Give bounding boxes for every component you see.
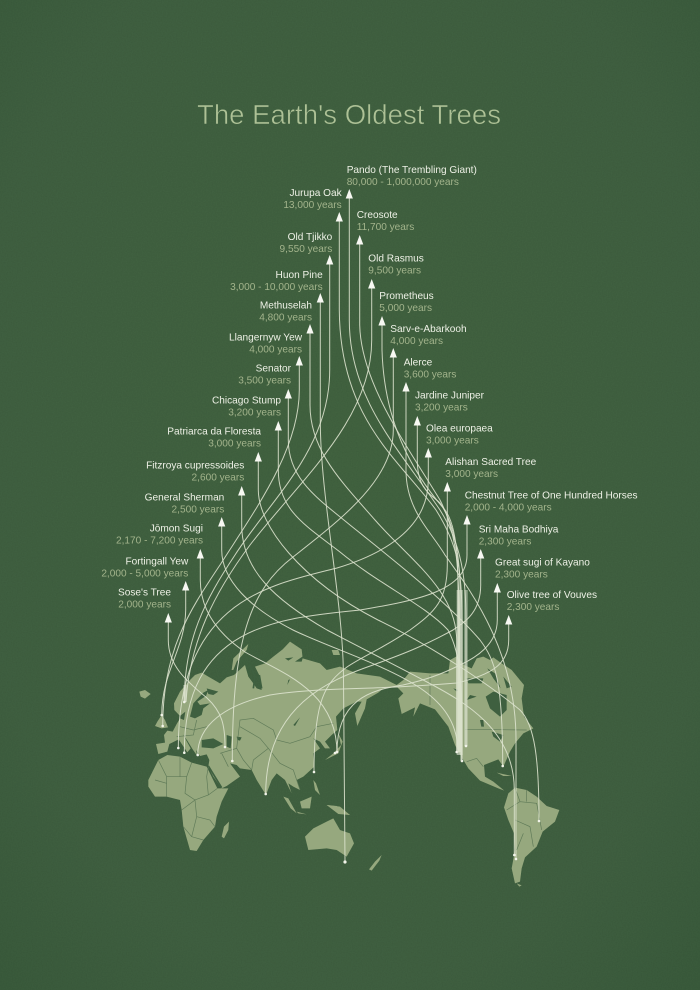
label: Olea europaea: Olea europaea	[426, 424, 493, 434]
map: islands and Australia	[139, 644, 354, 857]
arrow: Patriarca da Floresta	[255, 452, 540, 822]
map: inland seas and lakes	[190, 656, 512, 748]
arrow: Alerce	[402, 382, 517, 860]
arrow: Sarv-e-Abarkooh	[231, 348, 397, 762]
label: Fitzroya cupressoides: Fitzroya cupressoides	[146, 460, 244, 472]
map: landmasses, Old World coordinates	[139, 642, 533, 857]
label: Fitzroya cupressoides: 2,600 years	[192, 472, 244, 484]
label: Pando: Pando (The Trembling Giant)	[347, 165, 477, 176]
arrow: Jardine Juniper	[414, 416, 460, 752]
label: Chicago Stump: Chicago Stump	[212, 396, 281, 406]
arrow: Old Tjikko	[183, 255, 333, 703]
arrow: Olive tree of Vouves	[196, 615, 512, 756]
label: Chicago Stump: 3,200 years	[228, 408, 281, 418]
label: Alishan Sacred Tree: 3,000 years	[445, 469, 498, 480]
label: Huon Pine	[230, 270, 323, 293]
label: Prometheus: Prometheus	[379, 291, 434, 302]
label: Great sugi of Kayano: Great sugi of Kayano	[495, 558, 590, 568]
arrow: Huon Pine	[317, 293, 347, 864]
label: Sarv-e-Abarkooh: Sarv-e-Abarkooh	[390, 324, 467, 335]
label: Prometheus	[379, 291, 434, 314]
label: Chestnut Tree of One Hundred Horses	[465, 490, 638, 514]
arrow: Sose's Tree	[165, 613, 226, 748]
label: Huon Pine: Huon Pine	[276, 270, 323, 281]
label: Great sugi of Kayano	[495, 558, 590, 580]
label: Sri Maha Bodhiya	[479, 524, 559, 548]
label: Methuselah: 4,800 years	[259, 312, 312, 324]
label: Huon Pine: 3,000 - 10,000 years	[230, 282, 323, 293]
label: Patriarca da Floresta: Patriarca da Floresta	[167, 426, 261, 438]
label: Pando	[347, 165, 477, 188]
map: Africa	[148, 755, 228, 851]
label: Old Tjikko	[280, 232, 333, 255]
arrow: Jomon Sugi	[197, 549, 337, 754]
label: Olea europaea	[426, 424, 493, 446]
label: Llangernyw Yew: 4,000 years	[249, 344, 302, 356]
label: Chicago Stump	[212, 396, 281, 418]
label: Sarv-e-Abarkooh	[390, 324, 467, 347]
label: Fitzroya cupressoides	[146, 460, 244, 484]
label: Fortingall Yew	[101, 556, 189, 580]
label: Sose's Tree	[118, 588, 171, 610]
label: Old Rasmus: Old Rasmus	[368, 254, 424, 264]
label: Pando: 80,000 - 1,000,000 years	[347, 177, 459, 188]
label: Sose's Tree: Sose's Tree	[118, 588, 171, 598]
label: Methuselah	[259, 300, 312, 324]
arrow: Methuselah	[306, 324, 458, 753]
label: Olive tree of Vouves: Olive tree of Vouves	[507, 590, 597, 601]
label: Senator: Senator	[256, 364, 292, 374]
label: Olea europaea: 3,000 years	[426, 436, 479, 446]
label: Jardine Juniper: 3,200 years	[415, 402, 468, 414]
label: Old Tjikko: 9,550 years	[280, 244, 332, 255]
label: Senator: 3,500 years	[238, 376, 291, 386]
arrow: Chestnut Tree of One Hundred Horses	[183, 515, 471, 754]
label: Old Rasmus: 9,500 years	[368, 266, 421, 276]
label: Sri Maha Bodhiya: Sri Maha Bodhiya	[479, 524, 559, 536]
label: Jurupa Oak	[283, 188, 343, 211]
label: Creosote: 11,700 years	[357, 222, 414, 233]
label: Alerce: 3,600 years	[404, 370, 456, 380]
arrow: Llangernyw Yew	[161, 356, 303, 727]
label: General Sherman: 2,500 years	[172, 504, 224, 516]
label: Prometheus: 5,000 years	[379, 303, 432, 314]
label: General Sherman: General Sherman	[145, 492, 224, 504]
label: Jurupa Oak: Jurupa Oak	[290, 188, 343, 199]
label: Sose's Tree: 2,000 years	[118, 600, 171, 610]
label: Llangernyw Yew	[229, 332, 303, 356]
label: General Sherman	[145, 492, 224, 516]
map: country borders	[155, 675, 527, 840]
label: Jardine Juniper	[415, 390, 485, 414]
label: Sarv-e-Abarkooh: 4,000 years	[390, 336, 443, 347]
label: Jomon Sugi	[116, 524, 203, 546]
arrow: Fortingall Yew	[160, 581, 189, 716]
arrow: Pando	[346, 189, 467, 747]
label: Jomon Sugi: 2,170 - 7,200 years	[116, 536, 203, 546]
label: Senator	[238, 364, 292, 386]
map: Siberian inlets	[250, 665, 262, 688]
label: Old Tjikko: Old Tjikko	[288, 232, 333, 243]
bundle: overlapping California and Nevada lines	[184, 590, 468, 755]
arrow: Fitzroya cupressoides	[238, 486, 516, 856]
label: Alishan Sacred Tree	[445, 457, 537, 480]
label: Olive tree of Vouves: 2,300 years	[507, 602, 559, 613]
arrow: Sri Maha Bodhiya	[264, 549, 484, 795]
label: Great sugi of Kayano: 2,300 years	[495, 570, 548, 580]
map: South America and New Zealand	[327, 773, 559, 887]
label: Creosote	[357, 210, 414, 233]
arrow: Olea europaea	[177, 448, 432, 749]
label: Old Rasmus	[368, 254, 424, 276]
label: Alerce	[404, 358, 456, 380]
map: Eurasia joined to North America	[156, 642, 533, 795]
label: Jardine Juniper: Jardine Juniper	[415, 390, 485, 402]
world map	[139, 642, 559, 887]
arrow: Alishan Sacred Tree	[313, 482, 451, 773]
arrow: Old Rasmus	[186, 279, 375, 702]
title: The Earth's Oldest Trees	[197, 99, 501, 130]
arrow: Chicago Stump	[275, 421, 461, 761]
map: Red Sea	[208, 766, 222, 788]
label: Creosote: Creosote	[357, 210, 398, 221]
label: Sri Maha Bodhiya: 2,300 years	[479, 536, 531, 548]
arrow: Prometheus	[378, 316, 458, 752]
label: Patriarca da Floresta	[167, 426, 261, 450]
label: Llangernyw Yew: Llangernyw Yew	[229, 332, 303, 344]
label: Alerce: Alerce	[404, 358, 433, 368]
label: Chestnut Tree of One Hundred Horses: 2,000 - 4,000 years	[465, 502, 552, 514]
arrow: Jurupa Oak	[336, 212, 463, 762]
arrow: Senator	[285, 389, 504, 767]
label: Jurupa Oak: 13,000 years	[283, 200, 342, 211]
label: Fortingall Yew: 2,000 - 5,000 years	[101, 568, 188, 580]
label: Jomon Sugi: Jōmon Sugi	[150, 524, 203, 534]
label: Chestnut Tree of One Hundred Horses: Chestnut Tree of One Hundred Horses	[465, 490, 638, 502]
label: Olive tree of Vouves	[507, 590, 597, 613]
arrow: General Sherman	[218, 517, 458, 753]
label: Patriarca da Floresta: 3,000 years	[208, 438, 261, 450]
label: Alishan Sacred Tree: Alishan Sacred Tree	[445, 457, 537, 468]
label: Methuselah: Methuselah	[260, 300, 312, 312]
arrow: Creosote	[356, 235, 459, 752]
label: Fortingall Yew: Fortingall Yew	[125, 556, 189, 568]
arrow: Great sugi of Kayano	[336, 583, 501, 753]
